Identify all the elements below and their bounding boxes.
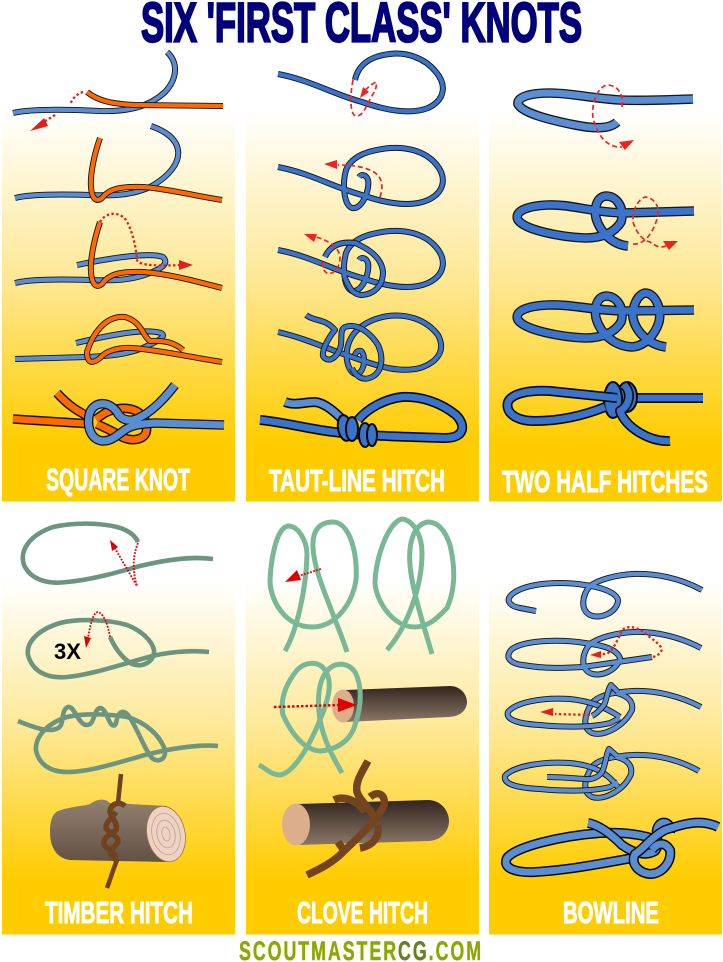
step 5 bowline finished <box>506 823 718 874</box>
label: BOWLINE <box>563 896 659 930</box>
step 2 taut-line <box>278 148 443 208</box>
step 2 clove stick and loop <box>259 663 467 775</box>
step 2 timber <box>28 612 209 677</box>
step 3 bowline <box>508 685 701 734</box>
label: CLOVE HITCH <box>297 896 428 930</box>
panel: clove hitch <box>246 510 479 934</box>
step 1 clove <box>270 522 356 652</box>
panel: bowline <box>489 510 722 934</box>
step 1 square knot <box>13 52 223 131</box>
step 2 half hitches <box>517 196 694 250</box>
step 4 taut-line <box>278 315 441 379</box>
step 1 taut-line <box>278 54 443 116</box>
step 3 half hitches <box>517 293 694 347</box>
step 2 bowline <box>508 627 701 675</box>
panel: square knot <box>2 50 235 502</box>
step 1 half hitches <box>518 85 693 150</box>
step 3 square knot <box>15 214 222 288</box>
timber log with rope <box>50 774 190 888</box>
step 4 half hitches finished <box>507 382 703 441</box>
panel: timber hitch <box>2 510 235 934</box>
step 5 square knot finished <box>13 385 224 441</box>
label: TIMBER HITCH <box>45 896 193 930</box>
step 3 clove stick and rope <box>282 761 449 875</box>
step 4 bowline <box>505 749 699 798</box>
label: TAUT-LINE HITCH <box>269 464 445 498</box>
step 5 taut-line finished <box>260 397 462 447</box>
step 4 square knot <box>15 317 222 362</box>
step 3 timber <box>18 707 218 772</box>
label: 3X: 3X <box>54 639 81 664</box>
step 1 timber <box>23 524 213 586</box>
step 3 taut-line <box>278 231 443 295</box>
panel: two half hitches <box>489 50 722 502</box>
step 2 square knot <box>15 126 222 200</box>
step 1 bowline <box>509 574 702 617</box>
step 1b clove <box>375 519 454 654</box>
panel: taut-line hitch <box>246 50 479 502</box>
label: SQUARE KNOT <box>46 463 190 497</box>
